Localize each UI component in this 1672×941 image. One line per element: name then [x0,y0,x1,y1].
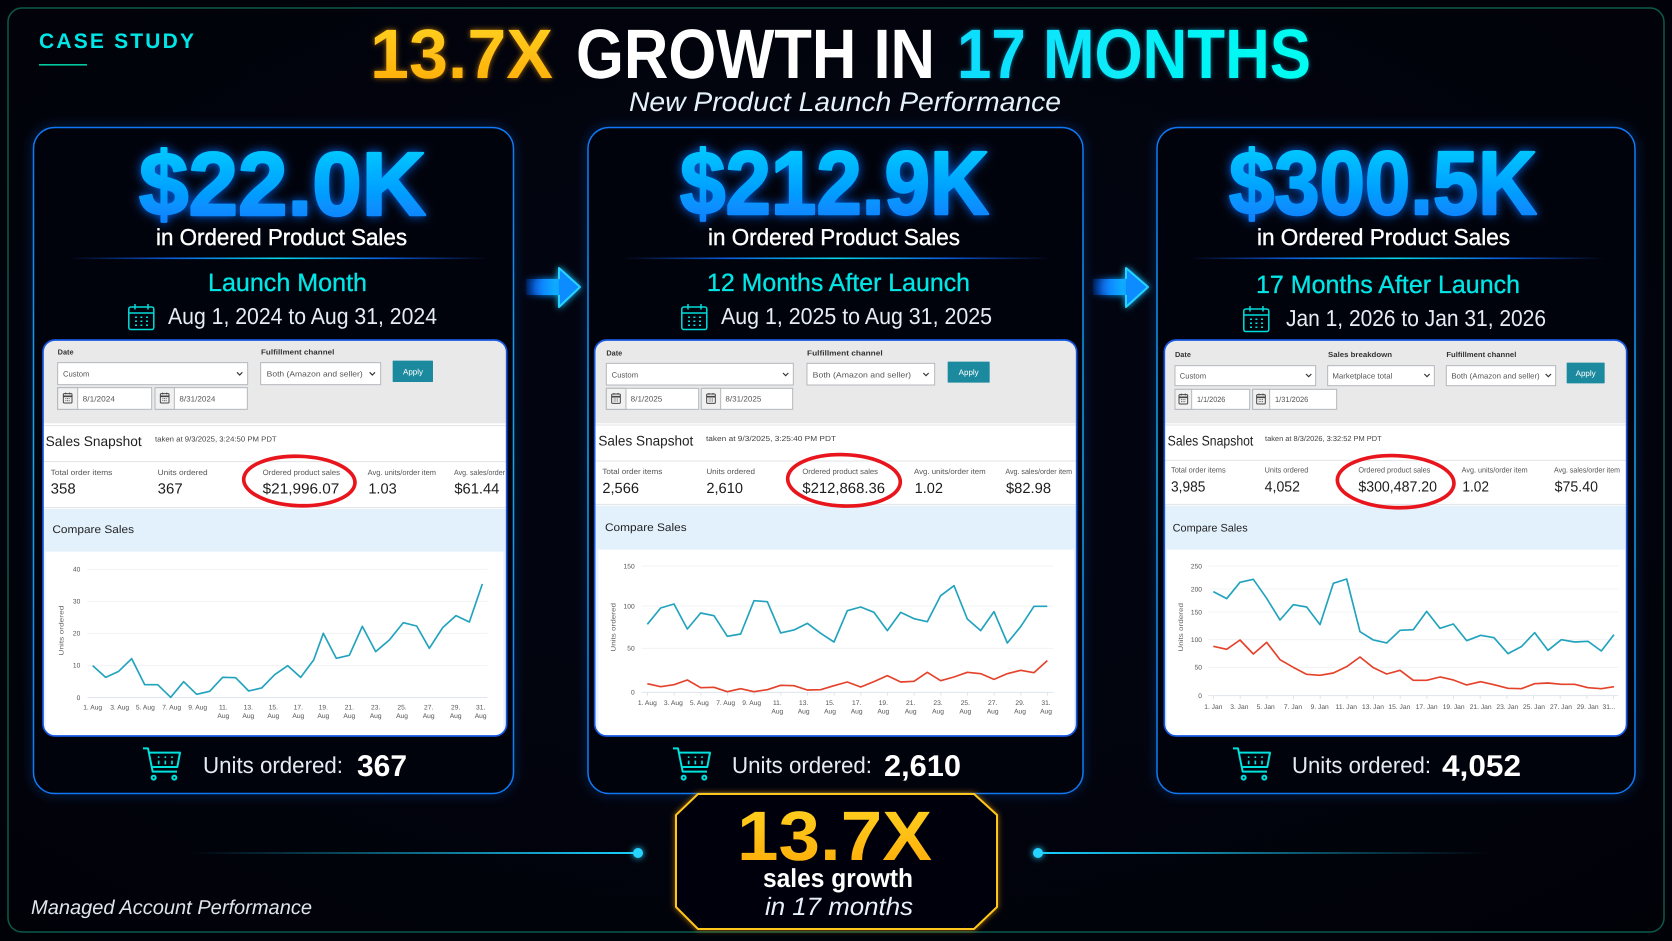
line chart: 15. [825,699,835,707]
line chart: 9. Aug [742,699,761,707]
date range: Aug 1, 2024 to Aug 31, 2024 [168,303,437,329]
line chart: 21. [906,699,915,707]
dashboard screenshot: $212,868.36 [802,480,885,496]
badge value: 13.7X [737,797,932,875]
callout: growth badge [676,794,997,929]
dashboard screenshot: Fulfillment channel [261,348,334,356]
line chart: 150 [624,563,635,570]
dashboard screenshot: taken at 8/3/2026, 3:32:52 PM PDT [1265,434,1382,443]
line chart: 3. Aug [664,699,683,707]
arrow [526,268,580,307]
dashboard screenshot: Apply [403,367,423,376]
dashboard screenshot: 2,566 [602,480,639,496]
date range: Jan 1, 2026 to Jan 31, 2026 [1286,305,1546,331]
line chart: 150 [1191,609,1202,616]
line chart: 25. [961,699,970,707]
dashboard screenshot: Sales breakdown [1328,350,1392,359]
line chart: 20 [73,630,80,637]
line chart: 17. [852,699,861,707]
line chart: 21. Jan [1470,703,1492,711]
dashboard screenshot: 8/1/2024 [83,395,115,403]
line chart: 5. Aug [136,704,155,711]
dashboard screenshot: Both (Amazon and seller) [813,371,911,379]
icon: calendar [1244,306,1269,332]
dashboard screenshot: 8/31/2025 [725,395,761,403]
dashboard screenshot: $61.44 [454,481,499,497]
line chart: Aug [959,708,971,715]
dashboard screenshot: Compare Sales [52,523,134,535]
line chart: 100 [624,603,635,610]
line chart: Aug [423,712,435,720]
dashboard screenshot: 3,985 [1171,479,1205,495]
dashboard screenshot [43,340,507,736]
dashboard screenshot: Both (Amazon and seller) [267,369,363,378]
dashboard screenshot: 8/31/2024 [179,395,215,403]
line chart: Aug [242,712,254,720]
dashboard screenshot: Avg. units/order item [914,467,986,476]
dashboard screenshot: Apply [959,368,979,377]
line chart: 25. Jan [1523,703,1545,711]
line chart: 27. Jan [1550,703,1572,711]
dashboard screenshot: Avg. units/order item [368,468,436,477]
line chart: 17. Jan [1416,703,1438,711]
footer note: Managed Account Performance [31,897,312,919]
units ordered: Units ordered: [732,752,872,778]
dashboard screenshot: Avg. sales/order [454,468,505,477]
dashboard screenshot [595,340,1077,736]
line chart: 3. Jan [1230,703,1248,711]
dashboard screenshot: 358 [51,481,76,497]
line chart: 0 [1198,692,1202,700]
dashboard screenshot: taken at 9/3/2025, 3:25:40 PM PDT [706,434,836,443]
units ordered [1292,750,1521,783]
line chart: 11. [219,704,228,711]
line chart: 30 [73,598,80,605]
line chart: 9. Jan [1311,703,1329,711]
line chart: 29. Jan [1577,703,1599,711]
dashboard screenshot: Avg. sales/order item [1005,467,1072,476]
dashboard screenshot: Total order items [602,467,662,476]
period heading: 17 Months After Launch [1256,271,1520,299]
line chart: 3. Aug [110,704,129,711]
line chart [58,566,487,720]
line chart: Units ordered [58,606,65,656]
sales caption: in Ordered Product Sales [1257,224,1510,250]
line chart: 50 [627,645,635,652]
line chart: 25. [397,704,407,711]
line chart: 0 [631,689,635,696]
badge sub-caption: in 17 months [765,893,913,921]
dashboard screenshot: $300,487.20 [1358,479,1437,495]
units ordered [732,750,961,783]
dashboard screenshot: Date [606,349,622,357]
line chart: 40 [73,566,80,573]
line chart: Aug [267,712,279,720]
dashboard screenshot: Date [1175,350,1191,359]
dashboard screenshot: Units ordered [706,467,755,476]
dashboard screenshot: Date [58,348,74,356]
line chart: 1. Jan [1204,703,1222,711]
sales value: $22.0K [139,135,426,235]
dashboard screenshot: Both (Amazon and seller) [1451,371,1540,380]
dashboard screenshot [1164,340,1627,736]
dashboard screenshot: Units ordered [1265,466,1308,474]
title [370,15,1311,93]
line chart: Aug [475,712,487,720]
dashboard screenshot: Custom [63,369,89,378]
line chart: 23. [933,699,943,707]
dashboard screenshot: Compare Sales [1173,522,1248,534]
dashboard screenshot: $21,996.07 [263,481,339,497]
line chart: Aug [343,712,355,720]
dashboard screenshot: Apply [1576,369,1596,378]
dashboard screenshot: Marketplace total [1332,371,1392,380]
highlight oval [243,454,356,508]
dashboard screenshot: 1.03 [368,481,397,497]
line chart: 23. [371,704,380,711]
dashboard screenshot: Compare Sales [605,521,687,533]
dashboard screenshot: 1.02 [915,480,943,496]
units ordered: Units ordered: [1292,752,1431,778]
dashboard screenshot: Sales Snapshot [598,433,693,448]
line chart: 29. [451,704,460,711]
connector right [1033,848,1488,858]
dashboard screenshot: Ordered product sales [1358,466,1430,474]
line chart: 29. [1015,699,1025,707]
line chart: 5. Jan [1257,703,1275,711]
period heading: 12 Months After Launch [707,269,970,297]
dashboard screenshot: $75.40 [1555,479,1598,495]
line chart: Aug [292,712,304,720]
line chart: Units ordered [1177,603,1185,652]
line chart: 100 [1191,636,1202,644]
line chart: Aug [1040,708,1052,715]
line chart: 23. Jan [1496,703,1518,711]
dashboard screenshot: Fulfillment channel [807,349,883,357]
units ordered: 2,610 [884,750,961,783]
line chart: 11. [773,699,782,707]
dashboard screenshot: Units ordered [158,468,208,477]
line chart: 200 [1191,586,1202,593]
units ordered [203,750,407,783]
line chart: Aug [771,708,783,715]
line chart: Units ordered [610,603,617,652]
line chart: 9. Aug [188,704,207,711]
line chart: 50 [1195,664,1202,671]
line chart: 31... [1603,703,1615,711]
line chart: 15. Jan [1388,703,1410,711]
line chart: 27. [988,699,997,707]
highlight oval [787,453,901,508]
line chart: Aug [824,708,836,715]
sales value: $212.9K [680,134,989,234]
line chart: 7. Aug [162,704,181,711]
line chart: 19. Jan [1443,703,1465,711]
line chart: 5. Aug [690,699,709,707]
connector left [190,848,643,858]
highlight oval [1336,454,1455,510]
line chart: Aug [1014,708,1026,715]
dashboard screenshot: Fulfillment channel [1446,350,1516,359]
line chart: 13. Jan [1362,703,1384,711]
line chart [610,563,1053,715]
sales caption: in Ordered Product Sales [156,224,407,250]
dashboard screenshot: Sales Snapshot [1168,433,1253,448]
dashboard screenshot: 8/1/2025 [631,395,662,403]
dashboard screenshot: Total order items [1171,466,1226,474]
line chart: Aug [798,708,810,715]
dashboard screenshot: Custom [1180,371,1206,380]
line chart: Aug [450,712,462,720]
dashboard screenshot: taken at 9/3/2025, 3:24:50 PM PDT [155,435,277,443]
dashboard screenshot: 4,052 [1265,479,1300,495]
dashboard screenshot: Total order items [51,468,112,477]
dashboard screenshot: $82.98 [1006,480,1051,496]
title: GROWTH IN [576,15,935,93]
line chart: 7. Jan [1284,703,1302,711]
line chart: Aug [317,712,329,720]
badge caption: sales growth [763,863,913,893]
line chart: Aug [217,712,229,720]
line chart: Aug [851,708,863,715]
panel: 17 months after launch [1157,128,1635,794]
line chart: 250 [1191,563,1202,570]
line chart: Aug [877,708,889,715]
dashboard screenshot: Custom [612,371,638,379]
panel: 12 months after launch [588,128,1083,794]
sales caption: in Ordered Product Sales [708,224,960,250]
title: 17 MONTHS [957,15,1311,93]
line chart: Aug [396,712,408,720]
subtitle: New Product Launch Performance [629,87,1061,117]
dashboard screenshot: Ordered product sales [802,467,878,476]
panel: launch month [34,128,514,794]
dashboard screenshot: Ordered product sales [263,468,340,477]
dashboard screenshot: 1/1/2026 [1197,395,1225,404]
dashboard screenshot: 367 [158,481,183,497]
title: 13.7X [370,15,553,93]
icon: calendar [129,304,154,330]
line chart: 13. [244,704,253,711]
icon: cart [1233,748,1270,780]
dashboard screenshot: 1/31/2026 [1275,395,1308,404]
line chart: Aug [987,708,999,715]
line chart [1177,563,1618,711]
dashboard screenshot: Sales Snapshot [46,433,142,449]
line chart: 1. Aug [638,699,657,707]
period heading: Launch Month [208,269,367,297]
line chart: Aug [370,712,382,720]
line chart: 27. [424,704,433,711]
icon: cart [143,748,180,780]
line chart: Aug [932,708,944,715]
icon: cart [673,748,710,780]
line chart: 31. [1041,699,1051,707]
sales value: $300.5K [1229,134,1537,234]
line chart: 19. [879,699,888,707]
line chart: 10 [73,662,80,669]
line chart: 31. [476,704,485,711]
line chart: 19. [319,704,328,711]
case study tag: CASE STUDY [39,30,194,53]
line chart: 11. Jan [1336,703,1357,711]
units ordered: 4,052 [1442,750,1521,783]
dashboard screenshot: 1.02 [1462,479,1489,495]
line chart: 17. [294,704,303,711]
date range: Aug 1, 2025 to Aug 31, 2025 [721,303,992,329]
line chart: 15. [269,704,278,711]
units ordered: Units ordered: [203,752,343,778]
line chart: 13. [799,699,808,707]
line chart: Aug [905,708,917,715]
line chart: 7. Aug [716,699,735,707]
arrow [1093,268,1148,307]
icon: calendar [682,304,707,330]
line chart: 21. [345,704,354,711]
dashboard screenshot: Avg. sales/order item [1554,466,1620,474]
dashboard screenshot: 2,610 [706,480,743,496]
line chart: 1. Aug [83,704,102,711]
units ordered: 367 [357,750,407,783]
line chart: 0 [77,694,80,702]
dashboard screenshot: Avg. units/order item [1462,466,1528,474]
